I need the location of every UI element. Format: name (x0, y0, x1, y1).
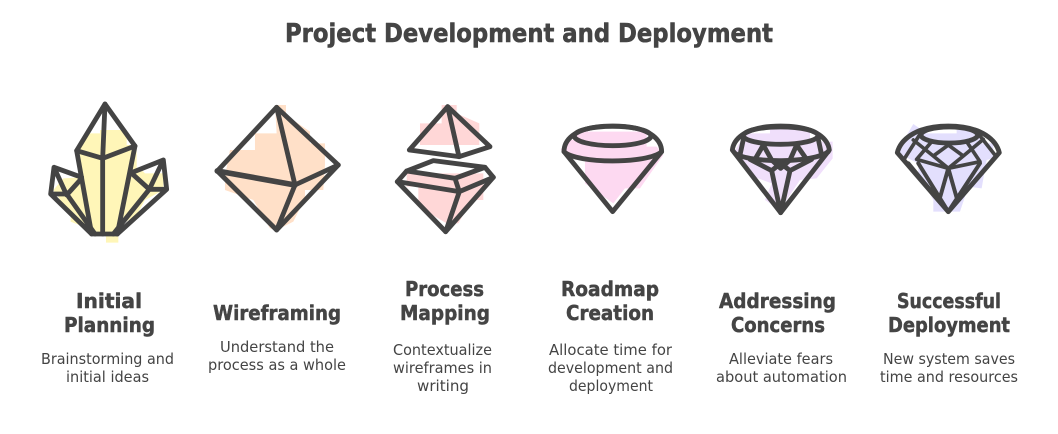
step 3 label: Mapping (400, 301, 490, 325)
step 1 label (41, 289, 174, 386)
icon: split gem (397, 105, 493, 232)
step 1 label: Initial (76, 289, 142, 313)
step 5 label (716, 289, 847, 386)
icon: crystal cluster (51, 104, 167, 243)
step 4 label: deployment (569, 377, 653, 395)
step 2 label (208, 301, 346, 374)
icon: faceted gem (732, 126, 833, 213)
icon: simple gem (561, 126, 663, 212)
step 2 label: process as a whole (208, 356, 346, 374)
step 6 label (880, 289, 1018, 386)
step 1 label: Planning (64, 313, 155, 337)
step 4 label: Allocate time for (549, 341, 673, 359)
step 5 label: Concerns (731, 313, 825, 337)
icon: brilliant gem (897, 124, 999, 212)
step 3 label: wireframes in (393, 359, 492, 377)
step 2 label: Understand the (220, 338, 334, 356)
title: Project Development and Deployment (285, 19, 773, 49)
step 3 label: writing (417, 377, 469, 395)
step 3 label: Process (405, 277, 484, 301)
step 4 label: Creation (566, 301, 654, 325)
step 1 label: initial ideas (66, 368, 149, 386)
step 6 label: Successful (897, 289, 1001, 313)
step 2 label: Wireframing (213, 301, 341, 325)
step 4 label: development and (548, 359, 673, 377)
step 5 label: Addressing (719, 289, 836, 313)
step 3 label (393, 277, 492, 395)
step 5 label: Alleviate fears (729, 350, 833, 368)
step 4 label (548, 277, 673, 395)
step 6 label: time and resources (880, 368, 1018, 386)
icon: octahedron (217, 105, 338, 230)
step 6 label: New system saves (883, 350, 1015, 368)
step 4 label: Roadmap (561, 277, 659, 301)
step 6 label: Deployment (888, 313, 1010, 337)
step 3 label: Contextualize (393, 341, 492, 359)
step 1 label: Brainstorming and (41, 350, 174, 368)
step 5 label: about automation (716, 368, 847, 386)
